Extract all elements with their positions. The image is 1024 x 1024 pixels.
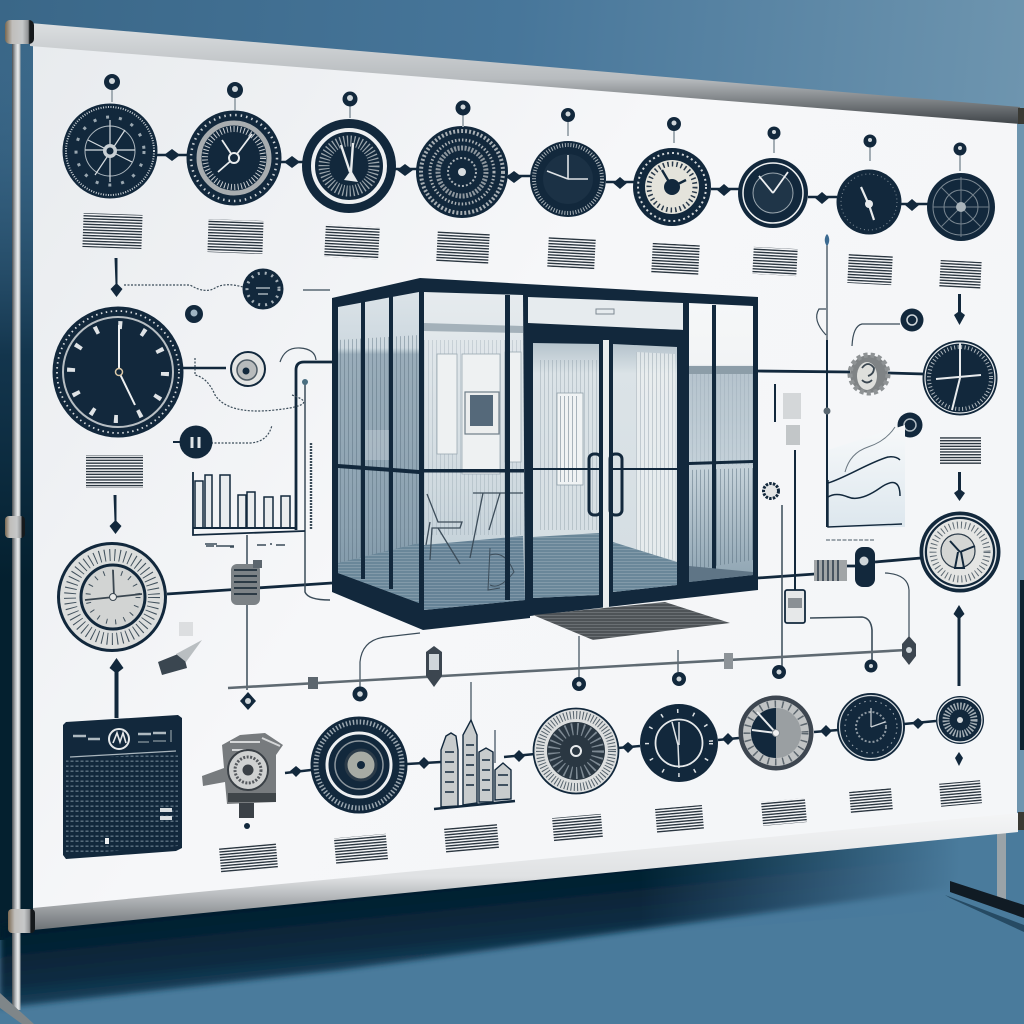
clock: bottom 6 [936,696,984,744]
clock: top 1 [62,104,158,198]
clock: top 5 [530,141,606,217]
indicator pins: timeline [240,636,916,710]
clock: large left [52,306,184,438]
connector diamonds: top row [164,149,919,211]
gear icon: right [850,355,888,393]
banner stand: right leg and foot [945,828,1024,932]
clock: bottom 5 [837,693,905,761]
text block: right [940,437,981,465]
clock: bottom 4 [738,696,814,770]
clock: bottom 3 [640,704,718,782]
small dial: upper left [242,268,284,310]
machine illustration [202,733,283,829]
right side: small device icons [764,234,924,623]
small device icons: left [158,560,262,675]
connector diamonds: bottom row [290,718,924,777]
chair and table [426,493,523,590]
top roller [5,20,1024,124]
clock: bottom 2 [534,708,618,794]
timeline bar [228,650,906,688]
right door leaf [613,344,677,592]
floor mat [533,602,730,640]
small dial: left [173,426,212,458]
banner stand: left pole [0,40,34,1024]
text block: left [86,455,143,488]
clock: top 4 [416,126,508,218]
front glass wall [424,292,525,610]
clock: top 9 [927,173,995,241]
right glass wall [689,303,753,582]
mullions: left wall and front [338,294,524,600]
clock: top 2 [186,110,282,206]
arrows: right column [954,294,965,766]
clock: top 8 [836,170,902,234]
clock: left lower [57,542,167,652]
pole clamp [5,516,25,538]
clock: right upper [922,340,998,416]
thin leader lines [124,240,909,720]
gear icon: left [231,352,265,386]
left glass wall [338,292,419,603]
door handles [589,454,622,515]
text blocks: bottom row [219,780,982,873]
indicator pins: top row [104,74,966,171]
line chart: right [828,425,905,527]
transom panel [528,297,683,330]
pin: upper left [185,305,203,323]
clock: top 3 [302,119,396,213]
text blocks: top row [82,213,982,289]
clock: right lower [920,512,1000,592]
arrows: left column [110,258,124,718]
clock: top 6 [633,148,711,226]
bottom roller [8,812,1024,933]
door centre stile [603,340,609,608]
bar chart [193,379,311,547]
clock: bottom 1 [310,716,408,814]
city skyline illustration [434,720,515,809]
building frame [332,278,758,630]
dark spec panel [63,715,182,859]
glass entrance building [332,278,758,640]
left door leaf [533,343,599,598]
connector lines [157,155,936,773]
clock: top 7 [738,158,808,228]
double door frame [527,325,685,614]
